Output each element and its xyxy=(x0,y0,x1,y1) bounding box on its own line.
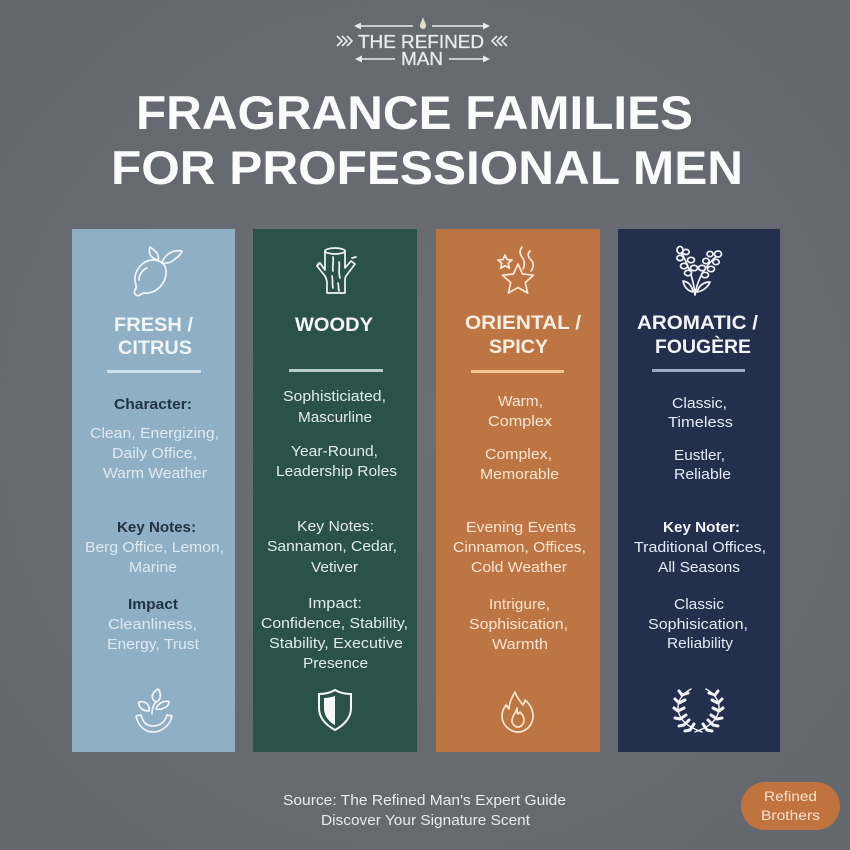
icon: log xyxy=(317,248,356,293)
text: character: Complex, xyxy=(485,446,552,463)
text: character: Daily Office, xyxy=(112,445,197,462)
heading: woody: WOODY xyxy=(295,315,373,336)
text: character: Warm Weather xyxy=(103,465,207,482)
text: key notes: Berg Office, Lemon, xyxy=(85,539,224,556)
icon: lemon xyxy=(134,247,182,296)
icon: lavender xyxy=(677,246,722,295)
text: character: Sophisticiated, xyxy=(283,388,386,405)
heading: fresh / citrus: FRESH / xyxy=(114,315,194,336)
text: impact: Energy, Trust xyxy=(107,636,200,653)
icon: shield xyxy=(319,690,351,730)
panel: aromatic / fougere xyxy=(618,229,780,752)
text: impact: Reliability xyxy=(667,635,734,652)
title: FOR PROFESSIONAL MEN xyxy=(111,141,743,194)
text: key notes xyxy=(634,519,766,576)
heading: oriental / spicy: SPICY xyxy=(489,337,548,358)
text: character: Timeless xyxy=(668,414,733,431)
heading: aromatic / fougere xyxy=(637,313,759,358)
text: character: Mascurline xyxy=(298,409,372,426)
text: character xyxy=(480,393,559,483)
heading: fresh / citrus xyxy=(114,315,194,359)
text: character: Warm, xyxy=(498,393,543,410)
text: impact: Classic xyxy=(674,596,725,613)
icon: sprout xyxy=(136,689,172,732)
text: impact: Sophisication, xyxy=(469,616,568,633)
heading: aromatic / fougere: FOUGÈRE xyxy=(655,336,751,358)
title xyxy=(111,86,743,194)
text: character: Reliable xyxy=(674,466,731,483)
text: impact: Warmth xyxy=(492,636,548,653)
text: character: Leadership Roles xyxy=(276,463,397,480)
text: character xyxy=(90,396,219,482)
text: key notes: Key Notes: xyxy=(117,519,196,536)
text: impact: Intrigure, xyxy=(489,596,550,613)
text: key notes xyxy=(453,519,586,576)
text: character xyxy=(668,395,733,483)
text: character: Classic, xyxy=(672,395,727,412)
text: key notes: Key Notes: xyxy=(297,518,374,535)
heading: oriental / spicy: ORIENTAL / xyxy=(465,313,582,334)
logo: The Refined Man: THE REFINED xyxy=(358,32,484,52)
text: character: Character: xyxy=(114,396,192,413)
heading: oriental / spicy xyxy=(465,313,582,358)
text: key notes xyxy=(267,518,397,576)
text: impact: Impact: xyxy=(308,595,362,612)
text: impact: Cleanliness, xyxy=(108,616,197,633)
text: key notes: Cinnamon, Offices, xyxy=(453,539,586,556)
text: impact xyxy=(261,595,408,672)
badge: Refined Brothers: Refined xyxy=(764,789,817,804)
badge: Refined Brothers: Brothers xyxy=(761,808,820,823)
source footer: Discover Your Signature Scent xyxy=(321,812,531,829)
icon: star and steam xyxy=(498,247,534,293)
text: impact: Stability, Executive xyxy=(269,635,403,652)
text: key notes: All Seasons xyxy=(658,559,740,576)
text: character: Clean, Energizing, xyxy=(90,425,219,442)
text: key notes: Traditional Offices, xyxy=(634,539,766,556)
source footer xyxy=(283,792,566,829)
source footer: Source: The Refined Man's Expert Guide xyxy=(283,792,566,809)
panel: fresh / citrus xyxy=(72,229,235,752)
text: impact xyxy=(107,596,200,653)
text: character: Eustler, xyxy=(674,447,725,464)
text: key notes: Vetiver xyxy=(311,559,358,576)
text: key notes: Key Noter: xyxy=(663,519,740,536)
logo: The Refined Man: MAN xyxy=(401,49,443,69)
text: key notes: Sannamon, Cedar, xyxy=(267,538,397,555)
title: FRAGRANCE FAMILIES xyxy=(136,86,693,139)
text: key notes xyxy=(85,519,224,576)
logo: The Refined Man xyxy=(337,17,507,69)
heading: aromatic / fougere: AROMATIC / xyxy=(637,313,759,334)
heading: fresh / citrus: CITRUS xyxy=(118,338,192,359)
text: character: Complex xyxy=(488,413,553,430)
panel: oriental / spicy xyxy=(436,229,600,752)
icon: flame xyxy=(502,692,533,732)
text: impact xyxy=(469,596,568,653)
text: character: Memorable xyxy=(480,466,559,483)
text: impact: Confidence, Stability, xyxy=(261,615,408,632)
text: impact: Impact xyxy=(128,596,178,613)
text: key notes: Cold Weather xyxy=(471,559,567,576)
panel: woody xyxy=(253,229,417,752)
icon: laurel wreath xyxy=(674,689,723,732)
badge: Refined Brothers xyxy=(741,782,840,830)
text: impact: Presence xyxy=(303,655,368,672)
text: key notes: Marine xyxy=(129,559,177,576)
text: impact xyxy=(648,596,748,652)
text: key notes: Evening Events xyxy=(466,519,576,536)
text: impact: Sophisication, xyxy=(648,616,748,633)
text: character xyxy=(276,388,397,480)
text: character: Year-Round, xyxy=(291,443,378,460)
